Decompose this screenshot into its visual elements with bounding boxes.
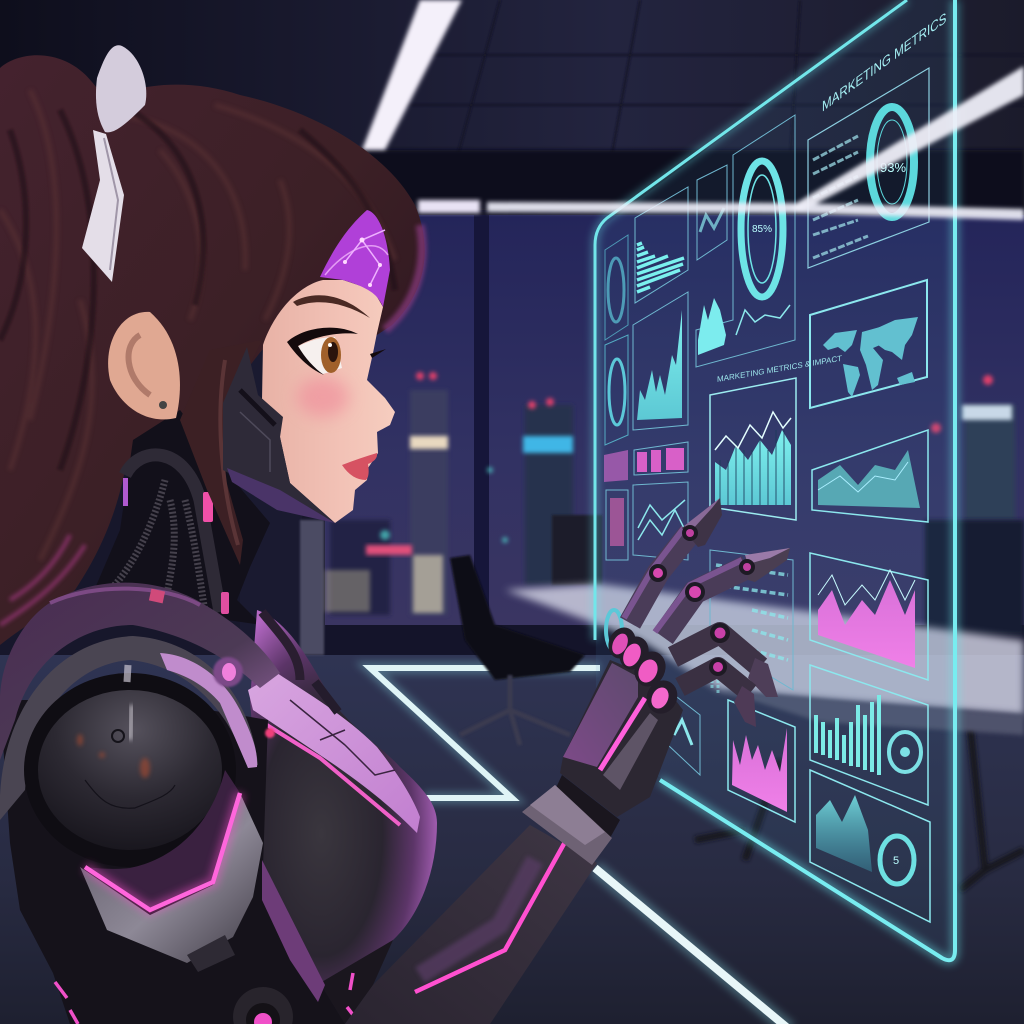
card: lower area chart with ring: 5 xyxy=(893,855,899,867)
character: front hair strand xyxy=(180,340,262,565)
character: hair back xyxy=(0,55,425,645)
character: forearm xyxy=(345,775,620,1024)
character: ear xyxy=(108,312,180,419)
card: top donut metrics xyxy=(808,68,929,268)
middle left pink tiles xyxy=(604,442,688,560)
card: small mid charts xyxy=(697,165,727,355)
finger: ring xyxy=(673,623,778,697)
small left gauges xyxy=(605,235,628,650)
finger: index xyxy=(624,498,722,623)
card: lower area chart with ring xyxy=(810,770,930,922)
character: hair ribbon xyxy=(82,45,146,282)
floor neon lines xyxy=(370,668,790,1024)
character: headband xyxy=(320,210,390,307)
ceiling neon lights xyxy=(362,0,480,213)
knuckle lights xyxy=(603,623,683,719)
character: neck cables xyxy=(90,410,270,625)
card: area chart xyxy=(812,430,928,522)
panel title: MARKETING METRICS xyxy=(822,10,946,116)
character: cyber jaw plate xyxy=(223,347,335,523)
card: large ring gauge xyxy=(696,115,795,367)
card: world map xyxy=(810,280,927,408)
card: pink lower chart xyxy=(728,700,795,822)
office table and chairs xyxy=(450,520,1024,890)
character: chest armor xyxy=(248,610,437,983)
night city skyline xyxy=(325,372,1015,615)
card: pink area chart xyxy=(810,553,928,680)
card: upper left stepped bars xyxy=(635,187,688,303)
card: large ring gauge: 85% xyxy=(752,224,772,235)
card: main line and bar chart: MARKETING METRICS & IMPACT xyxy=(717,354,842,384)
card: main line and bar chart xyxy=(710,354,842,520)
light streaks across panel xyxy=(487,66,1024,220)
finger: middle xyxy=(655,548,790,637)
character: robotic hand xyxy=(560,498,790,817)
character: face xyxy=(262,280,395,523)
card: rising area chart xyxy=(633,292,688,430)
character: torso and shoulder armor xyxy=(0,583,393,1024)
holographic panel xyxy=(595,0,955,962)
finger: little xyxy=(680,658,756,727)
card: bar chart with gauge xyxy=(810,665,928,805)
character: eye xyxy=(287,295,386,375)
card: top donut metrics: 93% xyxy=(880,160,906,175)
card: lower left tiles xyxy=(668,550,793,775)
